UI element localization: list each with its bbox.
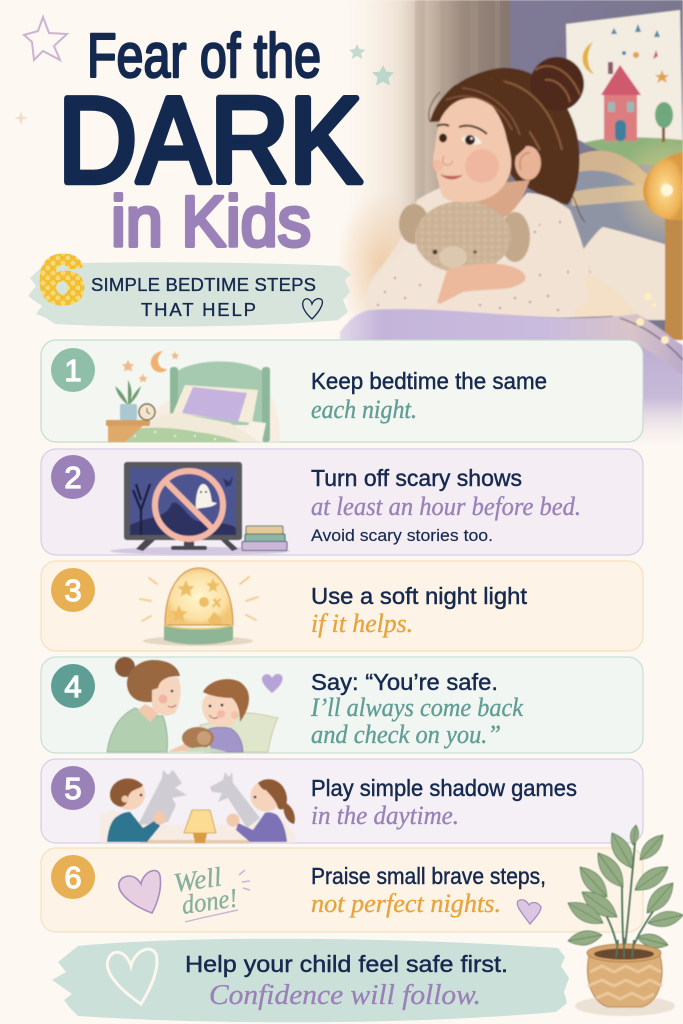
subtitle banner	[28, 242, 351, 327]
text: turn off scary shows: Turn off scary shows	[311, 465, 522, 491]
big number 6: 6	[39, 242, 85, 318]
card panel	[41, 848, 643, 932]
neck	[470, 180, 530, 218]
card 5	[41, 759, 643, 843]
title line: DARK: DARK	[58, 72, 362, 208]
back of hair and bun	[429, 57, 585, 222]
teddy bear	[399, 201, 530, 273]
card 4	[41, 657, 643, 753]
text: in the daytime: in the daytime.	[311, 801, 459, 830]
message line 2: Confidence will follow.	[209, 979, 481, 1011]
bottom message banner	[52, 939, 569, 1022]
mother	[107, 708, 168, 752]
step badge 3: 3	[64, 573, 82, 608]
subtitle text line 2: THAT HELP	[141, 299, 256, 320]
text: not perfect nights: not perfect nights.	[311, 889, 501, 918]
step badge 4	[51, 664, 95, 708]
text: always come back: I’ll always come back	[310, 693, 523, 722]
leaves	[568, 825, 683, 948]
text: soft night light: Use a soft night light	[311, 583, 527, 609]
text: avoid scary stories: Avoid scary stories too.	[311, 526, 493, 545]
title line: Fear of the: Fear of the	[87, 22, 321, 91]
step badge 2	[51, 455, 95, 499]
pink heart	[119, 871, 161, 913]
step badge 5	[51, 766, 95, 810]
woven basket	[587, 938, 662, 1007]
illustration: mother reassuring child	[107, 657, 283, 752]
bed headboard	[565, 151, 670, 270]
step badge 2: 2	[64, 460, 82, 495]
brush stroke background	[52, 939, 569, 1022]
message line 1: Help your child feel safe first.	[185, 951, 508, 977]
illustration: bed	[106, 351, 280, 442]
warm glow beside the arm	[336, 190, 428, 340]
decorative stars	[14, 17, 394, 126]
step badge 1	[51, 348, 95, 392]
girl	[236, 812, 287, 842]
card 3	[41, 561, 643, 651]
lilac blanket	[340, 294, 683, 450]
card panel	[41, 340, 643, 442]
title	[58, 22, 362, 262]
pajama body	[365, 188, 637, 318]
card panel	[41, 657, 643, 753]
pillow	[583, 227, 668, 320]
stems	[600, 830, 660, 957]
step badge 1: 1	[64, 353, 82, 388]
hand shadows	[138, 770, 187, 825]
well done note line 2: done!	[180, 882, 239, 920]
title line: in Kids: in Kids	[111, 183, 311, 262]
heart	[262, 674, 283, 693]
text: say you're safe: Say: “You’re safe.	[311, 669, 498, 695]
text: shadow games: Play simple shadow games	[311, 775, 577, 801]
text: praise small steps: Praise small brave steps,	[311, 863, 546, 889]
hugging arms	[365, 215, 590, 318]
illustration: shadow puppet play	[100, 770, 295, 843]
potted plant	[568, 825, 683, 1016]
card panel	[41, 759, 643, 843]
subtitle text: SIMPLE BEDTIME STEPS	[91, 274, 316, 295]
card panel	[41, 561, 643, 651]
girl's face	[431, 78, 541, 202]
text: if it helps: if it helps.	[311, 609, 413, 638]
lamp	[184, 810, 216, 833]
poster with child's drawing	[566, 10, 683, 170]
step badge 6: 6	[64, 860, 82, 895]
step badge 5: 5	[64, 771, 82, 806]
step badge 4: 4	[64, 669, 82, 704]
toy and blanket	[182, 727, 214, 749]
step badge 3	[51, 568, 95, 612]
card 6	[41, 848, 643, 932]
text: keep bedtime: Keep bedtime the same	[311, 368, 547, 394]
heart outline	[303, 299, 322, 319]
illustration: night light	[140, 568, 258, 646]
photo: girl hugging teddy bear in bed	[336, 0, 683, 340]
boy	[107, 812, 160, 842]
text: at least an hour: at least an hour before bed.	[311, 492, 581, 521]
card 1	[41, 340, 643, 442]
child	[207, 727, 243, 752]
small heart	[517, 900, 541, 924]
illustration: heart and well done	[119, 862, 250, 922]
pot shadow	[575, 996, 675, 1016]
heart outline	[107, 949, 157, 1004]
text: check on you: and check on you.”	[311, 720, 501, 749]
brush stroke background	[28, 262, 351, 327]
lamp glow and post	[613, 135, 683, 340]
step badge 6	[51, 855, 95, 899]
bedroom background	[340, 0, 683, 340]
card panel	[41, 449, 643, 555]
card 2	[41, 449, 643, 555]
well done note: Well	[172, 862, 223, 898]
text: each night: each night.	[311, 395, 417, 424]
illustration: tv with no-scary-shows sign and books	[110, 462, 290, 555]
pillow	[200, 713, 278, 752]
